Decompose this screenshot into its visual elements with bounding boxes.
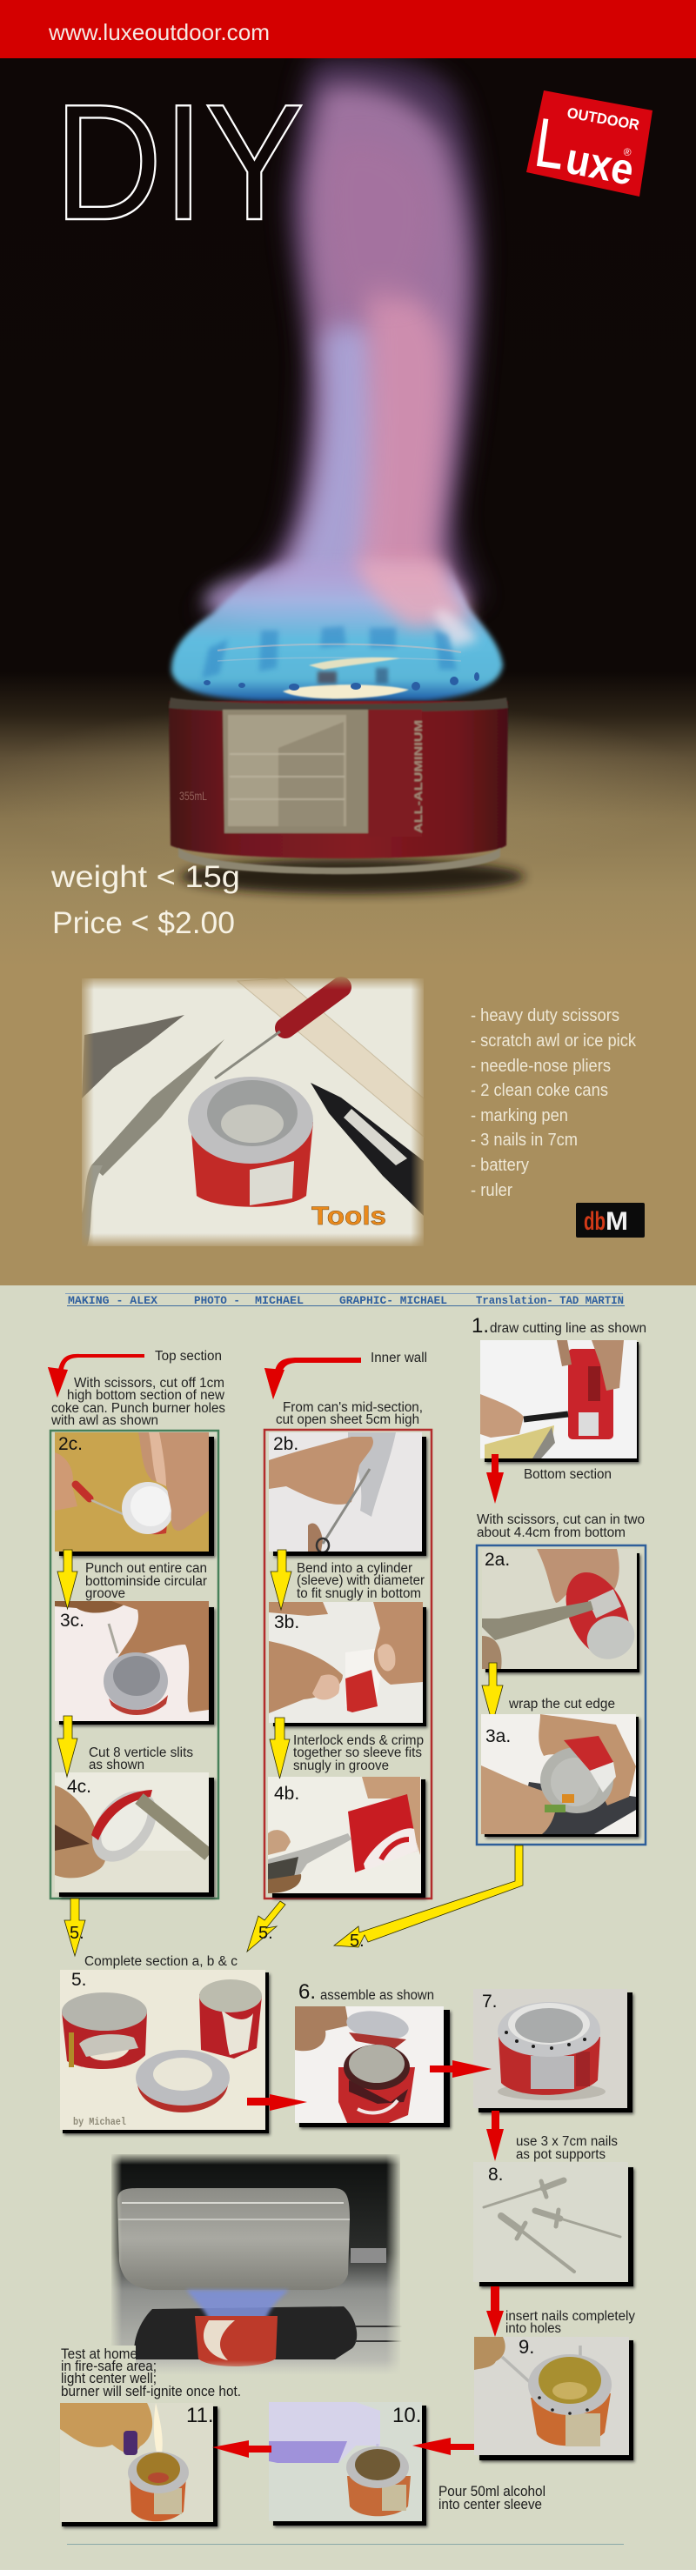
arrow: bottom section to step 5: [334, 1845, 523, 1951]
note text lines: light center well;: [61, 2370, 157, 2386]
flame: purple plume: [196, 57, 483, 633]
step 1 heading: draw cutting line as shown: [490, 1321, 646, 1336]
arrow: 9 to 10: [412, 2438, 474, 2455]
can volume mark: 355mL: [179, 789, 207, 803]
step 5 heading: Complete section a, b & c: [84, 1954, 238, 1969]
heading: top section: Top section: [155, 1349, 222, 1364]
arrow: 8 to 9: [486, 2286, 504, 2337]
flame: burner rim glints: [218, 644, 461, 698]
step 6 heading: assemble as shown: [320, 1988, 434, 2003]
step 8 text: as pot supports: [516, 2147, 606, 2162]
finished can stove: [188, 1077, 313, 1207]
pot: [117, 2188, 350, 2290]
step 4c number: 4c.: [67, 1777, 91, 1797]
can shadow on table: [180, 859, 525, 894]
credits bar: GRAPHIC- MICHAEL: [339, 1295, 447, 1307]
photo credit: by Michael: by Michael: [73, 2117, 126, 2128]
hero photo: flaming can stove on tan backdrop: [0, 57, 696, 1285]
feathered edges: [110, 2152, 402, 2377]
step 2c shadow: [59, 1437, 214, 1556]
step 6 heading: [298, 1980, 434, 2004]
logo: Outdoor Luxe: uxe: [562, 134, 638, 195]
photo 7: assembled burner: [473, 1989, 627, 2108]
step 2a text: about 4.4cm from bottom: [477, 1525, 626, 1540]
step 3b text: Bend into a cylinder: [297, 1561, 412, 1576]
feathered edges: [78, 974, 426, 1251]
website address: www.luxeoutdoor.com: [48, 19, 270, 45]
photo 1: [480, 1340, 637, 1458]
step 3c number: 3c.: [60, 1611, 84, 1631]
label: bottom section: Bottom section: [524, 1467, 612, 1482]
arrow: bottom section to step 5: 5.: [350, 1932, 365, 1951]
step text: cut open sheet: From can's mid-section,: [283, 1400, 423, 1415]
step 2b shadow: [273, 1437, 426, 1556]
arrow: 10 to 11: [212, 2440, 271, 2458]
can swirl: [204, 2320, 235, 2360]
arrow: 5 to 6: [247, 2094, 307, 2111]
step text: cut open sheet: [276, 1400, 423, 1427]
logo: dbM: db: [584, 1207, 606, 1236]
photo: pot on lit stove: [110, 2152, 402, 2377]
step 5 shadow: [63, 1972, 269, 2133]
step 11 shadow: [62, 2406, 218, 2526]
logo: Outdoor Luxe: L: [531, 103, 571, 184]
step 3b text: to fit snugly in bottom: [297, 1586, 421, 1601]
burner flame under pot: [186, 2290, 289, 2320]
photo 10: pouring alcohol: [269, 2402, 422, 2521]
step 1 heading: [472, 1314, 646, 1338]
step 3c text: groove: [85, 1586, 125, 1601]
step 3c text: Punch out entire can: [85, 1561, 207, 1576]
credits bar: [65, 1294, 625, 1307]
step 4b text: snugly in groove: [293, 1758, 389, 1773]
logo: dbM: M: [606, 1207, 628, 1236]
step 3a text: wrap the cut edge: [508, 1697, 615, 1712]
logo: Outdoor Luxe: ®: [622, 145, 632, 159]
note text lines: burner will self-ignite once hot.: [61, 2383, 241, 2399]
flame: blue burner ring: [171, 557, 503, 701]
step 4c text: [89, 1745, 193, 1772]
logo: Outdoor Luxe: OUTDOOR: [566, 104, 640, 134]
step 9 text: insert nails completely: [505, 2309, 635, 2324]
photo 2c: [55, 1432, 209, 1552]
step 3c text: bottominside circular: [85, 1574, 207, 1589]
step 2a text: [477, 1512, 645, 1540]
step 10 text: into center sleeve: [438, 2496, 542, 2513]
tools photo: [78, 974, 426, 1251]
step 10 shadow: [273, 2406, 426, 2526]
panel: bottom section blue frame: [477, 1545, 646, 1845]
step 8 shadow: [479, 2167, 633, 2286]
specs: weight and price: weight < 15g: [50, 860, 240, 894]
step text: cut open sheet: cut open sheet 5cm high: [276, 1412, 419, 1427]
arrow: 2c to 3c: [57, 1550, 77, 1609]
step 1 heading: 1.: [472, 1314, 489, 1338]
credits bar: MICHAEL: [255, 1295, 304, 1307]
step text: cut bottom section: coke can. Punch burner holes: [51, 1401, 225, 1416]
tools list: - 2 clean coke cans: [471, 1081, 608, 1100]
panel: top section green frame: [50, 1431, 218, 1899]
tools list: - heavy duty scissors: [471, 1006, 619, 1025]
step 4b shadow: [272, 1779, 425, 1898]
step 10 number: 10.: [392, 2404, 421, 2427]
step 2a text: With scissors, cut can in two: [477, 1512, 645, 1527]
tools list: [471, 1006, 637, 1200]
step 4b number: 4b.: [274, 1784, 299, 1804]
can in pot photo: [195, 2316, 278, 2366]
specs: weight and price: Price < $2.00: [52, 906, 235, 940]
credits bar: Translation- TAD MARTIN: [476, 1295, 624, 1307]
step 10 text: Pour 50ml alcohol: [438, 2483, 545, 2499]
photo 3a: [481, 1714, 636, 1834]
step 9 number: 9.: [519, 2336, 534, 2358]
step text: cut bottom section: high bottom section of new: [67, 1388, 225, 1403]
ruler: [238, 978, 424, 1137]
pot lid seams: [118, 2203, 350, 2219]
photo 11: lighting the stove: [60, 2403, 213, 2522]
step 11 number: 11.: [186, 2404, 214, 2427]
step 8 text: [516, 2134, 618, 2162]
step 3b shadow: [273, 1607, 426, 1726]
page background: pale instructions area: [0, 1285, 696, 2570]
arrow: 6 to 7: [430, 2060, 492, 2078]
step text: cut bottom section: With scissors, cut off 1cm: [74, 1376, 224, 1391]
header bar: [0, 0, 696, 58]
note text lines: [61, 2346, 241, 2399]
marker pen: [311, 1083, 424, 1216]
step 3c shadow: [59, 1607, 214, 1725]
pot handle: [351, 2248, 386, 2263]
step 6 shadow: [299, 2010, 450, 2127]
panel: inner wall red frame: [264, 1430, 432, 1899]
can body with label: [169, 697, 508, 874]
text backing and note: test at home: [57, 2346, 246, 2403]
arrow: inner wall to step 5: [247, 1901, 285, 1952]
photo 4c: [55, 1772, 209, 1892]
credits bar: PHOTO -: [194, 1295, 240, 1307]
flame: burner holes: [204, 672, 479, 691]
step 3a shadow: [485, 1717, 639, 1837]
photo 6: assemble: [295, 2006, 444, 2123]
arrow: top section to step 5: 5.: [70, 1924, 84, 1943]
step 3b text: [297, 1561, 425, 1601]
step 4b text: Interlock ends & crimp: [293, 1733, 424, 1748]
photo 3c: [55, 1601, 209, 1721]
label: Tools: Tools: [311, 1202, 386, 1231]
credits bar: MAKING - ALEX: [68, 1295, 157, 1307]
wires: [355, 2326, 402, 2341]
note text lines: in fire-safe area;: [61, 2358, 157, 2374]
step 3a number: 3a.: [485, 1726, 511, 1746]
arrow: 2a to 3a: [482, 1663, 503, 1724]
step 7 shadow: [478, 1992, 632, 2112]
step 10 text: [438, 2483, 545, 2513]
tools list: - 3 nails in 7cm: [471, 1131, 578, 1150]
step 6 heading: 6.: [298, 1980, 316, 2004]
step 3c text: [85, 1561, 207, 1601]
step 4c shadow: [59, 1778, 214, 1897]
step 2b number: 2b.: [273, 1434, 298, 1454]
pliers: [82, 1015, 184, 1098]
step 3b text: (sleeve) with diameter: [297, 1573, 425, 1588]
stove stand: [134, 2306, 357, 2359]
logo: dbM: [576, 1203, 645, 1238]
step 4b text: together so sleeve fits: [293, 1745, 422, 1760]
step 9 shadow: [479, 2340, 633, 2460]
photo 2b: [269, 1432, 422, 1552]
awl: [215, 987, 341, 1078]
step text: cut bottom section: [50, 1376, 225, 1428]
step 4b text: [293, 1733, 424, 1773]
can printed text: ALL-ALUMINIUM: [412, 720, 425, 833]
tools list: - marking pen: [471, 1106, 568, 1125]
step text: cut bottom section: with awl as shown: [50, 1413, 158, 1428]
photo 2a: [482, 1549, 637, 1669]
step 9 text: into holes: [505, 2321, 561, 2336]
arrow: 7 to 8: [486, 2111, 504, 2161]
photo 4b: [268, 1777, 421, 1893]
step 2a shadow: [485, 1553, 639, 1672]
tools list: - needle-nose pliers: [471, 1057, 611, 1076]
arrow: 1 to 2a: [486, 1454, 504, 1504]
photo 3b: [269, 1602, 423, 1723]
title: DIY outline lettering: DIY: [54, 70, 304, 255]
scissors: [82, 1039, 224, 1246]
step 4c text: Cut 8 verticle slits: [89, 1745, 193, 1760]
arrow: top section to step 5: [64, 1899, 85, 1956]
tools list: - ruler: [471, 1181, 512, 1200]
step 4c text: as shown: [89, 1758, 144, 1772]
logo: Outdoor Luxe: [526, 90, 652, 197]
photo 9: inserting nails: [474, 2337, 629, 2455]
tools list: - scratch awl or ice pick: [471, 1031, 637, 1051]
note text lines: Test at home: [61, 2346, 137, 2362]
step 5 number: 5.: [71, 1970, 87, 1990]
arrow: inner wall to step 5: 5.: [258, 1924, 273, 1943]
arrow: 3b to 4b: [270, 1718, 290, 1779]
step 7 number: 7.: [482, 1992, 498, 2012]
step 3b number: 3b.: [274, 1612, 299, 1632]
step 2c number: 2c.: [58, 1434, 83, 1454]
specs: weight and price: [50, 860, 240, 940]
step 8 text: use 3 x 7cm nails: [516, 2134, 618, 2149]
arrow: 2b to 3b: [271, 1550, 291, 1610]
step 2a number: 2a.: [485, 1550, 510, 1570]
tools list: - battery: [471, 1156, 529, 1175]
step 9 text: [505, 2309, 635, 2336]
photo 8: nails: [473, 2162, 628, 2282]
heading: inner wall: Inner wall: [371, 1351, 427, 1365]
arrow: 3c to 4c: [57, 1716, 77, 1777]
column heading arrow: inner wall: [264, 1351, 427, 1399]
column heading arrow: top section: [48, 1349, 222, 1398]
photo 5: three sections: [60, 1970, 265, 2130]
step 1 shadow: [485, 1342, 639, 1462]
step 8 number: 8.: [488, 2165, 504, 2185]
